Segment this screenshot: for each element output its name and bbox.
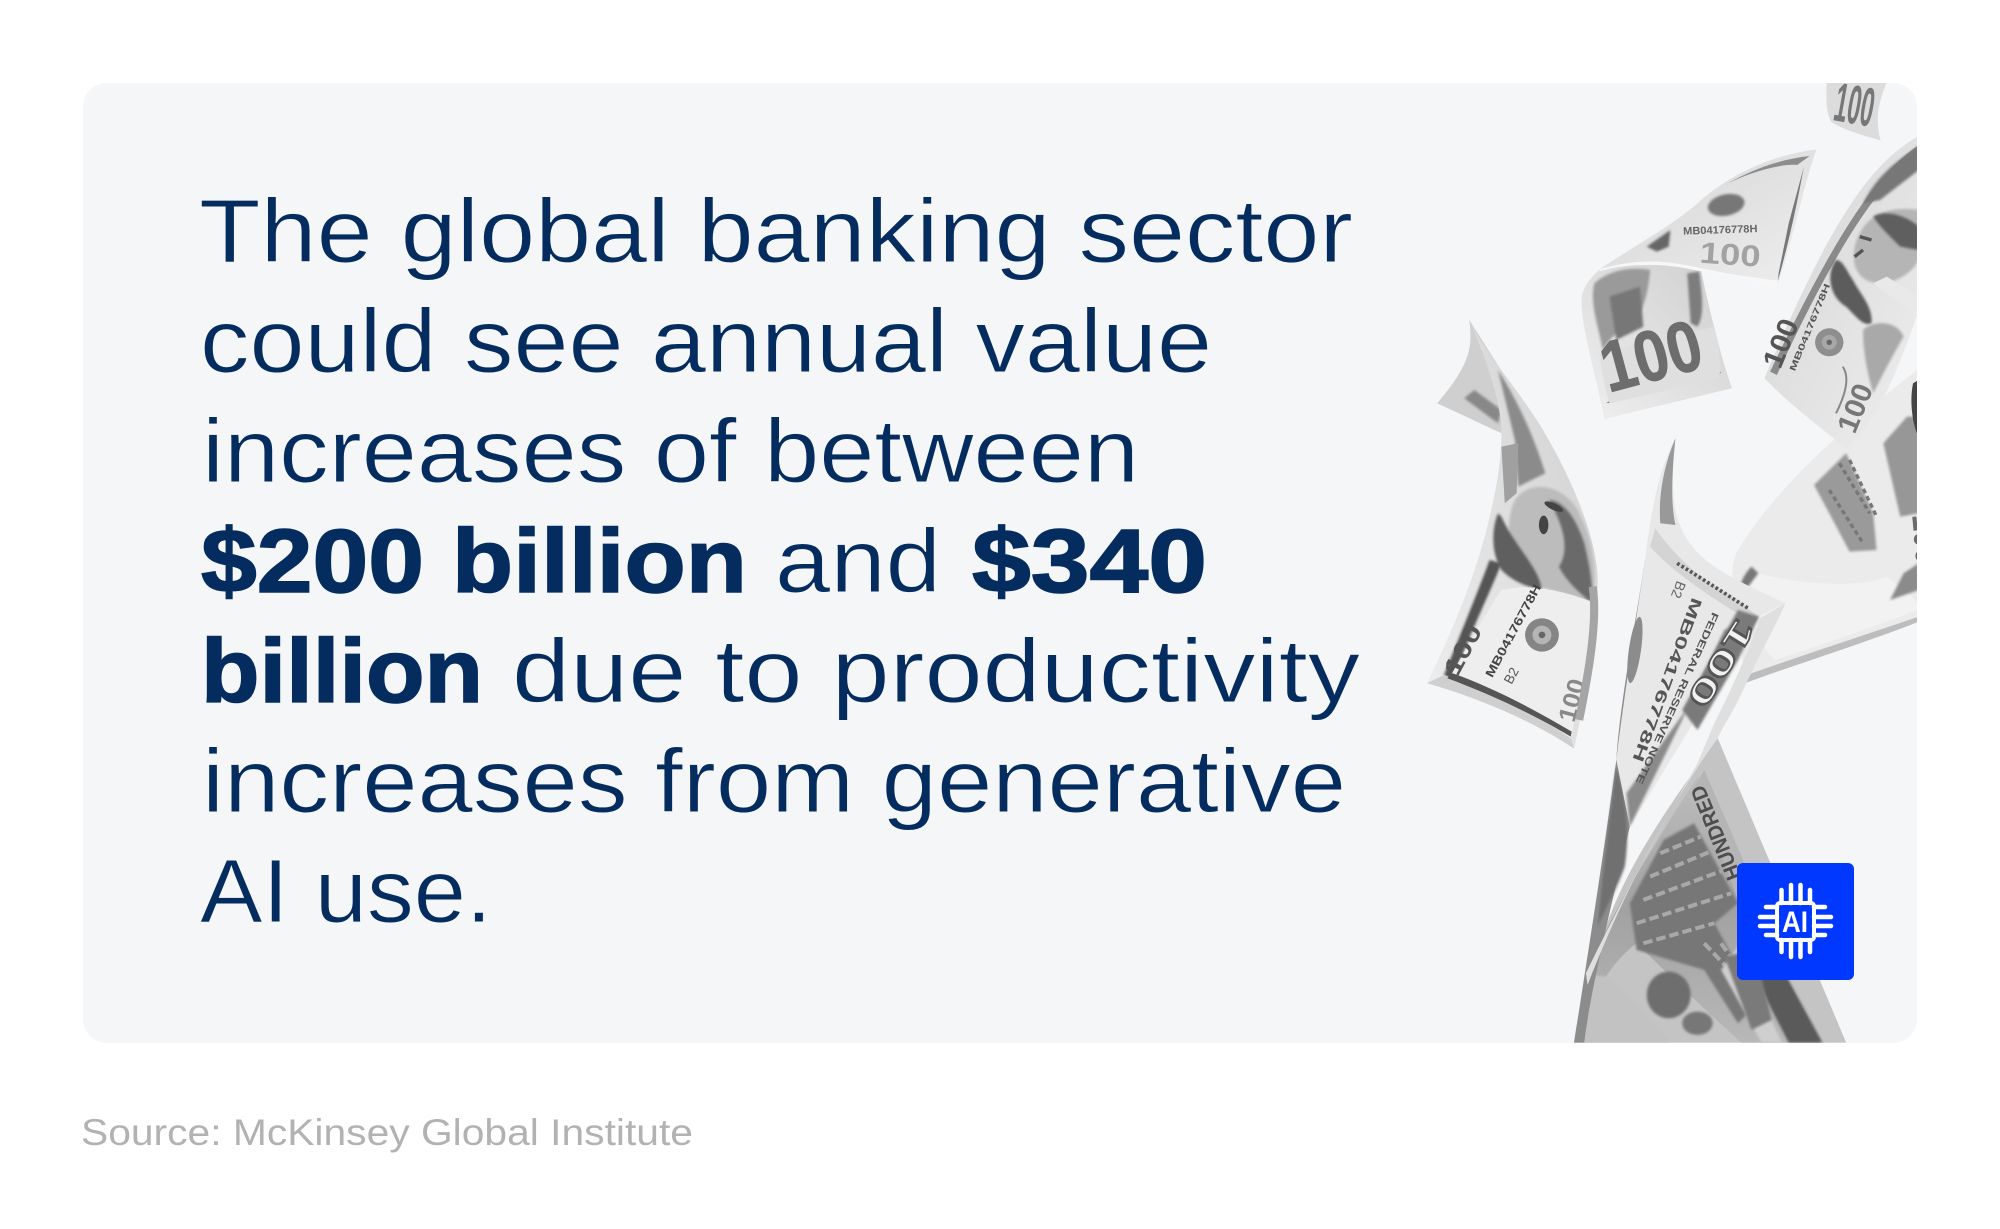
bill: upper right with portrait: MB04176778H (1787, 282, 1832, 372)
bill: left portrait bill (1427, 320, 1598, 749)
badge: AI chip icon: AI (1782, 906, 1808, 939)
bill: upper right with portrait: 100 (1831, 379, 1880, 438)
bill: center fold with serial: FEDERAL RESERVE NOTE (1633, 610, 1720, 786)
headline text block (199, 182, 1360, 942)
bill: left portrait bill: 100 (1439, 620, 1488, 680)
illustration: falling dollar bills (1427, 71, 1953, 1043)
headline text block: The global banking sector (199, 182, 1353, 282)
bill: lower right curling, behind (1732, 368, 1953, 683)
bill: center fold with serial: MB04176778H (1628, 595, 1705, 764)
bill: center fold with serial: 100 (1680, 613, 1763, 714)
headline text block: billion (201, 622, 483, 722)
bill: lower center large face (1574, 738, 1846, 1043)
bill: lower right curling, behind: 100 (1903, 512, 1953, 566)
headline text block: could see annual value (200, 292, 1212, 392)
bill: curled center bill (1581, 149, 1816, 419)
bill: left portrait bill: 100 (1554, 676, 1591, 725)
bill: curled center bill: MB04176778H (1683, 223, 1758, 238)
headline text block: AI use. (200, 842, 492, 942)
bill: lower center large face: HUNDRED (1687, 782, 1746, 883)
bill: top corner fragment (1826, 83, 1886, 140)
icon: chip pins (1760, 885, 1831, 957)
badge: AI chip icon (1737, 863, 1854, 980)
bill: top corner fragment: 100 (1830, 71, 1879, 138)
bill: curled center bill: 100 (1592, 305, 1711, 408)
bill: upper right with portrait (1757, 136, 1919, 448)
bill: curled center bill: 100 (1699, 237, 1762, 274)
headline text block: increases of between (202, 402, 1139, 502)
bill: left portrait bill: MB04176778H (1482, 582, 1544, 680)
bill: left portrait bill: B2 (1501, 665, 1522, 686)
bill: center fold with serial (1574, 438, 1785, 1043)
source note: Source: McKinsey Global Institute (81, 1112, 693, 1153)
headline text block: due to productivity (512, 622, 1360, 722)
headline text block: increases from generative (202, 732, 1346, 832)
panel: background card (83, 83, 1917, 1043)
bill: upper right with portrait: 100 (1757, 314, 1806, 373)
headline text block: and (775, 512, 941, 612)
headline text block: $200 billion (201, 512, 747, 612)
bill: center fold with serial: B2 (1668, 579, 1689, 601)
headline text block: $340 (972, 512, 1207, 612)
